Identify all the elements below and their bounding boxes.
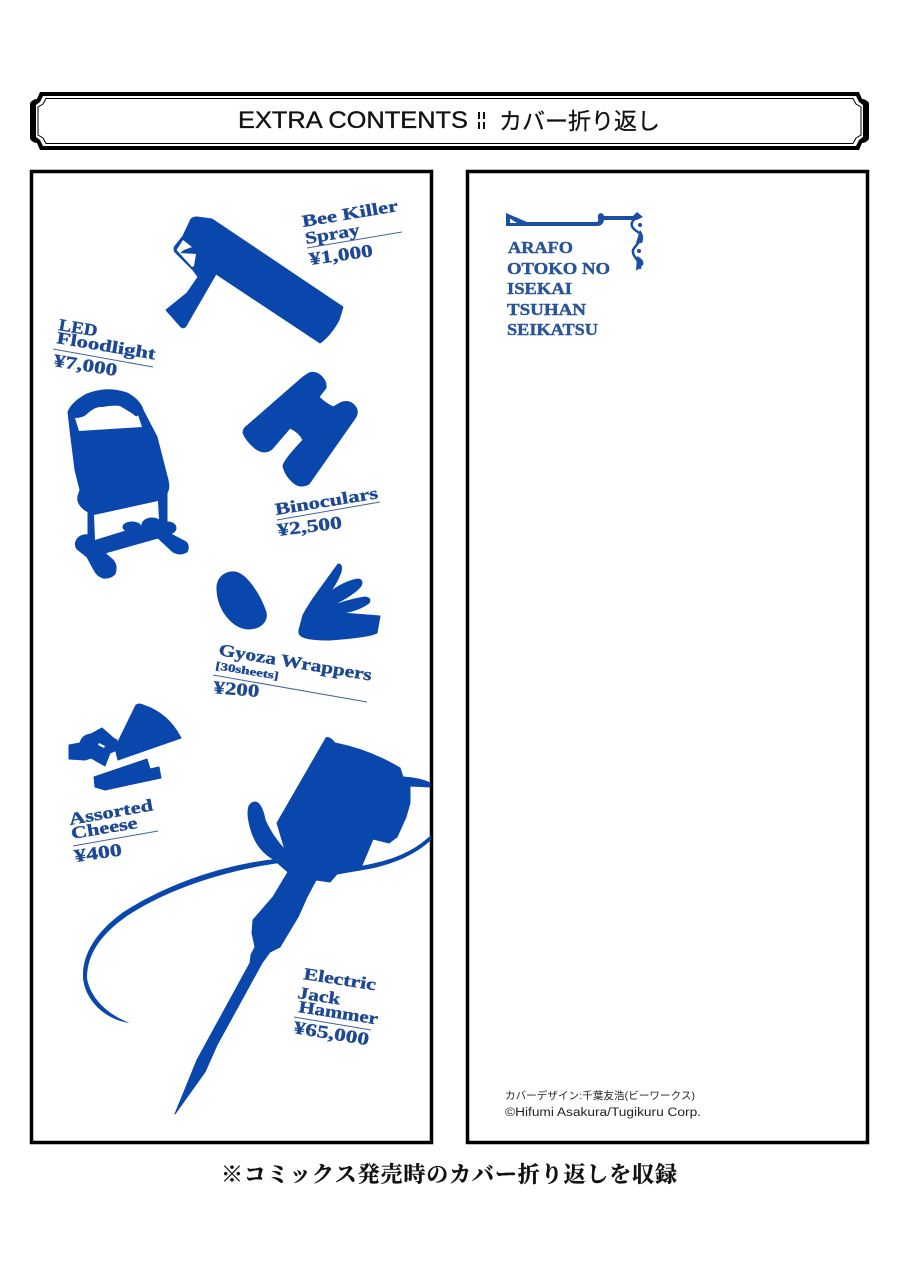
icon: LED floodlight [68,390,188,578]
label: LED floodlight: Floodlight [55,328,158,364]
icon: electric jack hammer [83,738,431,1114]
label: gyoza wrappers: ¥200 [213,677,260,701]
label: bee killer spray: Bee Killer [301,196,400,231]
label: bee killer spray: Spray [304,220,362,248]
heading banner [30,92,869,150]
label: assorted cheese: Assorted [67,795,155,829]
panel: left cover flap [32,172,432,1142]
label: bee killer spray: ¥1,000 [308,240,374,269]
label: binoculars [274,483,380,540]
text: series title: ARAFO [508,238,573,257]
text: series title: SEIKATSU [507,320,598,339]
label: electric jack hammer: ¥65,000 [292,1017,371,1049]
icon: title ornament [506,212,643,271]
text: series title: TSUHAN [507,300,586,319]
text: credits: ©Hifumi Asakura/Tugikuru Corp. [505,1107,701,1119]
label: electric jack hammer: Electric [302,964,378,994]
text: series title: ISEKAI [507,279,572,298]
icon: folding knife [299,564,380,640]
label: electric jack hammer: Jack [296,983,342,1009]
label: LED floodlight: LED [57,315,99,340]
label: electric jack hammer [292,964,380,1049]
panel: right cover flap [468,172,868,1142]
text: series title: OTOKO NO [507,259,610,278]
icon: gyoza wrappers [217,572,266,629]
icon: assorted cheese [69,704,181,790]
label: assorted cheese: Cheese [70,813,139,843]
text: series title [507,238,610,339]
icon: binoculars [243,372,357,486]
heading banner: EXTRA CONTENTS [238,107,468,134]
text: credits [505,1089,701,1119]
label: electric jack hammer: Hammer [297,997,380,1028]
text: credits: カバーデザイン:千葉友浩(ビーワークス) [505,1089,695,1102]
label: gyoza wrappers: [30sheets] [215,660,280,683]
label: binoculars: ¥2,500 [276,512,343,540]
label: LED floodlight: ¥7,000 [52,350,119,380]
label: assorted cheese [67,795,158,866]
label: binoculars: Binoculars [274,483,380,519]
icon: bee killer spray [166,217,343,343]
label: bee killer spray [301,196,402,269]
label: assorted cheese: ¥400 [73,839,123,866]
label: LED floodlight [52,315,158,380]
heading banner: カバー折り返し [499,108,660,134]
label: gyoza wrappers: Gyoza Wrappers [217,640,374,685]
footnote: ※コミックス発売時のカバー折り返しを収録 [221,1162,677,1187]
label: gyoza wrappers [213,640,374,702]
